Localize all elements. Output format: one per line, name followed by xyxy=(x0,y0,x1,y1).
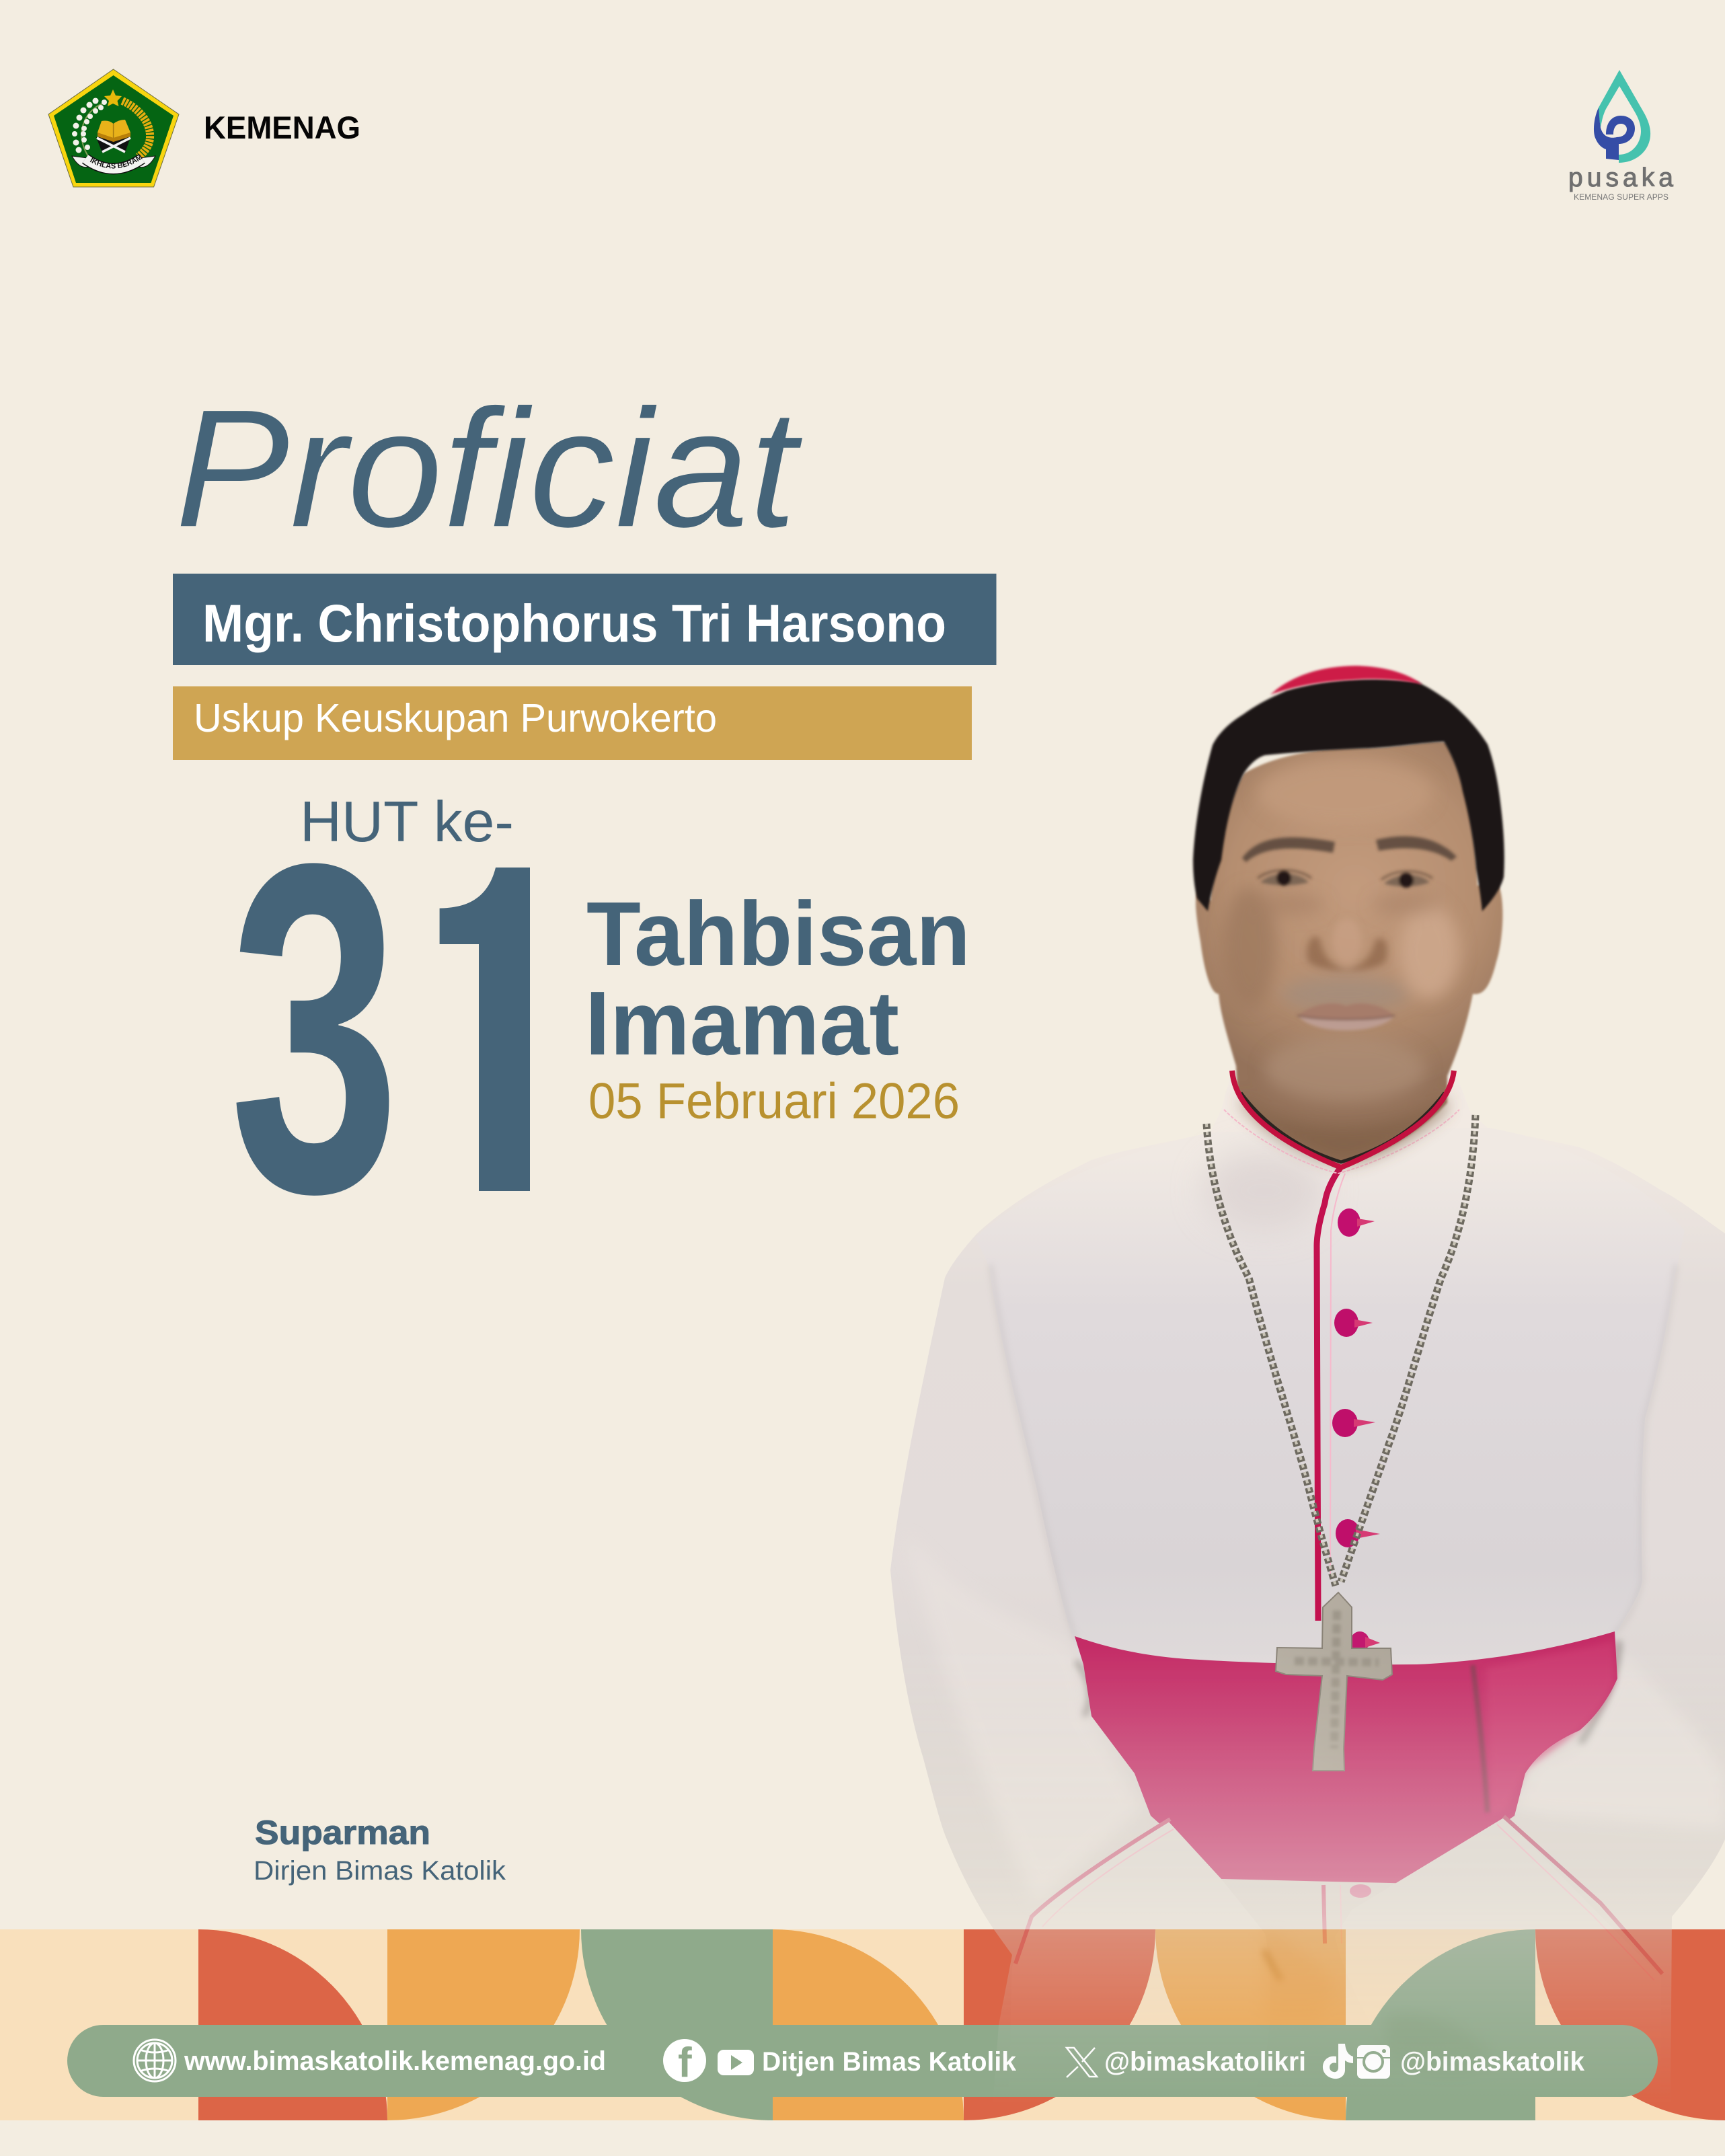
big number 31: 3 xyxy=(229,766,400,1290)
logo: Pusaka super apps: pusaka xyxy=(1568,163,1673,192)
text: signatory xyxy=(254,1814,506,1886)
text: signatory: Suparman xyxy=(255,1814,430,1851)
big number 31: 1 xyxy=(281,755,655,1297)
face: eyes xyxy=(1258,870,1432,888)
face: eyebrows xyxy=(1242,836,1457,862)
icon: tiktok xyxy=(1323,2044,1353,2079)
footer contact pill xyxy=(67,2025,1658,2097)
logo: Pusaka super apps xyxy=(1568,70,1673,202)
garment: cassock body and sleeves xyxy=(890,1191,1725,2065)
face: mouth xyxy=(1297,1003,1395,1030)
panel: role bar: Uskup Keuskupan Purwokerto xyxy=(194,696,717,740)
icon: instagram xyxy=(1357,2045,1390,2079)
portrait of bishop xyxy=(890,666,1725,2105)
accessory: pectoral cross xyxy=(1276,1592,1392,1771)
accessory: pectoral chain xyxy=(1206,1115,1475,1586)
label: HUT ke-: HUT ke- xyxy=(300,790,514,854)
footer pattern band xyxy=(0,1929,1725,2120)
panel: role bar xyxy=(173,686,972,760)
panel: name bar: Mgr. Christophorus Tri Harsono xyxy=(202,593,946,653)
garment: collar shadow xyxy=(1209,1150,1319,1225)
text: signatory: Dirjen Bimas Katolik xyxy=(254,1856,506,1886)
icon: facebook: f xyxy=(678,2040,692,2086)
face: neck and head skin xyxy=(1196,742,1502,1163)
icon: X xyxy=(1067,2048,1097,2077)
garment: fascia sash xyxy=(1075,1631,1617,1884)
logo: Pusaka super apps: KEMENAG SUPER APPS xyxy=(1574,194,1669,202)
text: Tahbisan Imamat xyxy=(585,883,970,1074)
hair xyxy=(1193,679,1504,911)
garment: torso front xyxy=(1040,1484,1641,1584)
panel: name bar xyxy=(173,574,997,665)
zucchetto xyxy=(1270,666,1422,695)
heading: KEMENAG: KEMENAG xyxy=(204,110,360,145)
collar trim xyxy=(1232,1071,1454,1167)
text: instagram and tiktok handle: @bimaskatolik xyxy=(1400,2047,1585,2077)
text: Tahbisan Imamat: Imamat xyxy=(585,972,899,1074)
text: website: www.bimaskatolik.kemenag.go.id xyxy=(184,2046,606,2076)
text: date: 05 Februari 2026 xyxy=(588,1073,960,1129)
garment: cuffs xyxy=(1009,1816,1662,2098)
garment: placket trim xyxy=(1224,1110,1459,1621)
text: X handle: @bimaskatolikri xyxy=(1104,2047,1306,2077)
title: Proficiat: Proficiat xyxy=(175,375,803,563)
logo: Kemenag emblem xyxy=(48,69,180,187)
icon: youtube xyxy=(718,2050,754,2075)
garment: buttons xyxy=(1332,1208,1380,1652)
face: nose xyxy=(1307,919,1387,971)
icon: facebook xyxy=(663,2039,706,2086)
face: shading xyxy=(1223,760,1459,1163)
garment: hands in fade xyxy=(1264,1930,1493,2078)
icon: globe xyxy=(134,2040,176,2081)
text: youtube and facebook handle: Ditjen Bimas Katolik xyxy=(762,2047,1017,2077)
garment: sleeve shading xyxy=(1021,1423,1040,1507)
text: Tahbisan Imamat: Tahbisan xyxy=(586,883,970,985)
